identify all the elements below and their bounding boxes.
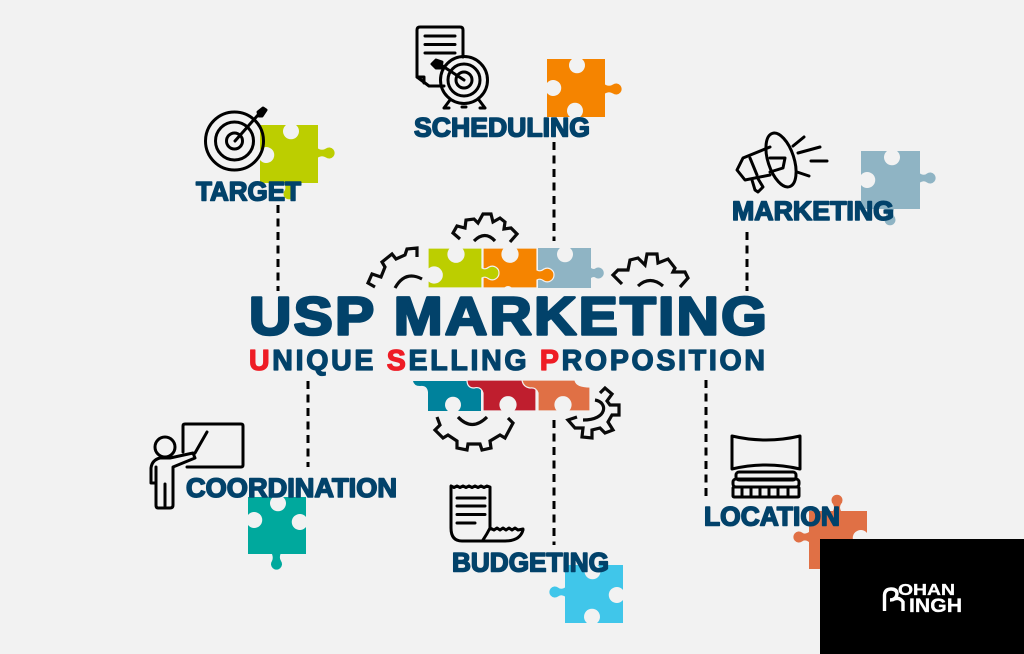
puzzle: blue center — [538, 248, 604, 288]
label: marketing: MARKETING — [732, 196, 894, 226]
connector: marketing — [746, 232, 748, 291]
panel: target — [196, 108, 335, 206]
label: target: TARGET — [196, 176, 301, 206]
label: scheduling: SCHEDULING — [414, 112, 590, 142]
puzzle: red — [467, 380, 536, 411]
label: coordination: COORDINATION — [186, 473, 397, 503]
puzzle: scheduling orange — [547, 59, 622, 117]
gear: right — [613, 254, 688, 287]
logo: text bottom: INGH — [909, 596, 962, 617]
connector: location — [704, 380, 708, 499]
black background — [820, 539, 1024, 654]
puzzle: budgeting sky blue — [549, 565, 623, 623]
panel: marketing — [732, 129, 936, 226]
logo block — [820, 539, 1024, 654]
icon: document with target — [417, 27, 488, 108]
puzzle: coral — [522, 380, 590, 411]
icon: cinema screen and seats — [732, 436, 800, 497]
puzzle: target green — [260, 125, 335, 199]
gear: bottom center — [435, 417, 513, 450]
connector: coordination — [306, 381, 310, 467]
panel: scheduling — [414, 27, 622, 142]
puzzle: orange center — [483, 248, 554, 288]
gear: bottom right — [568, 388, 619, 438]
panel: budgeting — [451, 486, 623, 623]
central graphic: puzzle pieces and gears below title — [413, 380, 619, 450]
puzzle: location coral — [793, 495, 867, 569]
title: USP MARKETING — [249, 286, 769, 346]
panel: location — [704, 436, 867, 569]
puzzle: teal — [413, 381, 481, 411]
logo: text top: OHAN — [898, 582, 955, 599]
label: budgeting: BUDGETING — [452, 547, 609, 577]
gear: top center — [453, 214, 517, 242]
puzzle notch — [503, 286, 513, 296]
connector: budgeting — [552, 420, 556, 545]
icon: presenter at board — [151, 424, 243, 508]
icon: target — [206, 108, 266, 170]
logo: mark — [884, 589, 903, 611]
subtitle: UNIQUE SELLING PROPOSITION — [249, 345, 765, 377]
connector: scheduling — [552, 142, 556, 241]
connector: target — [276, 205, 280, 291]
gear: left — [368, 248, 422, 288]
puzzle: green center — [428, 248, 499, 288]
central graphic: gears and puzzle pieces above title — [368, 214, 688, 296]
panel: coordination — [151, 424, 397, 570]
icon: receipt — [451, 486, 523, 541]
label: location: LOCATION — [704, 501, 840, 531]
puzzle: coordination teal — [248, 497, 306, 570]
puzzle: marketing blue — [861, 151, 936, 225]
icon: megaphone — [737, 129, 827, 192]
